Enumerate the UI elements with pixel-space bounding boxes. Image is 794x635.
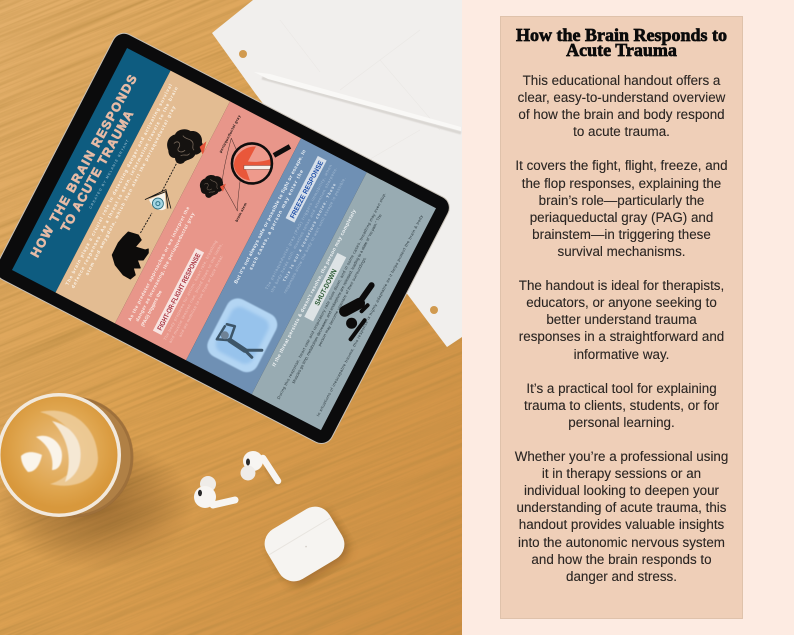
description text: responses in a straightforward and: [519, 329, 724, 344]
dotted line bear to eye: [140, 213, 152, 233]
description text: better understand trauma: [546, 312, 697, 327]
cork coaster: [13, 397, 133, 517]
heading: Acute Trauma: [566, 40, 677, 60]
intro text: defence responses. As a threat is seen, information travels to the brain: [70, 86, 179, 289]
title text: HOW THE BRAIN RESPONDS: [28, 73, 140, 260]
description text: it in therapy sessions or an: [542, 466, 701, 481]
freeze intro text: such cases, a person may enter the: [248, 169, 305, 271]
predator text: (PAG) triggers the: [140, 289, 163, 327]
icon: small brain with PAG: [200, 175, 226, 198]
label: freeze response: FREEZE RESPONSE: [289, 160, 325, 220]
label: periaqueductal gray: periaqueductal gray: [219, 114, 242, 154]
description text: educators, or anyone seeking to: [526, 295, 717, 310]
title text: TO ACUTE TRAUMA: [58, 108, 136, 234]
predator text: danger as increasing, the periaqueductal gray: [135, 211, 195, 322]
right text panel: [462, 0, 794, 635]
shut down intro text: If the threat persists & doesn't resolve, the person may completely: [271, 209, 358, 368]
section: shut down: [252, 172, 439, 432]
section: freeze response: [186, 138, 367, 394]
desk scene: [0, 0, 462, 635]
description text: and how the brain responds to: [531, 552, 712, 567]
dotted line eye to brain: [162, 162, 177, 191]
description text: brainstem—in triggering these: [532, 227, 711, 242]
latte art: [21, 411, 98, 486]
heading: How the Brain Responds to: [516, 25, 727, 45]
shut down description: person may become unaware of their surroundings.: [317, 256, 367, 347]
tablet: [0, 29, 454, 448]
description text: individual looking to deepen your: [524, 483, 719, 498]
heading: [516, 25, 727, 60]
description text: the flop responses, explaining the: [522, 176, 721, 191]
description text: personal learning.: [568, 415, 675, 430]
title credit: CREATED BY MELANIE BRYANT: [88, 139, 130, 209]
coffee shadow: [0, 440, 195, 570]
section: title band: [12, 48, 171, 293]
freeze description: the body holds still, muscles tense and attention sharpens.: [269, 166, 338, 293]
freeze description: responses allow the body to wait until escape is possible.: [282, 176, 347, 294]
freeze intro text: But it's not always safe or possible to fight or escape. In: [233, 149, 308, 285]
airpods case shadow: [264, 505, 354, 591]
description text: This educational handout offers a: [523, 73, 720, 88]
fight or flight description: and we mobilise to run from or face threat.: [177, 254, 224, 338]
screen: infographic page: [12, 48, 439, 432]
description text: brain’s role—particularly the: [539, 193, 704, 208]
icon: collapsed figure: [345, 285, 372, 339]
icon: figure frozen in ice block: [203, 294, 281, 376]
freeze description: This is not a conscious choice. These: [282, 182, 337, 282]
description text: [514, 73, 728, 584]
intro text: stem and amygdala, which then alert the periaqueductal gray: [84, 105, 176, 276]
description text: informative way.: [574, 346, 669, 362]
icon: large brain: [167, 129, 206, 164]
predator text: As the predator approaches or we interpret the: [127, 206, 191, 322]
description text: periaqueductal gray (PAG) and: [530, 210, 713, 225]
freeze description: The periaqueductal gray (PAG) triggers immobility, when: [264, 164, 333, 290]
label: brain stem: brain stem: [235, 202, 248, 223]
description text: understanding of acute trauma, this: [517, 500, 726, 515]
white paper sheet: [212, 0, 462, 347]
description text: The handout is ideal for therapists,: [519, 278, 724, 293]
description text: It covers the fight, flight, freeze, and: [515, 158, 728, 173]
icon: earbud right: [240, 451, 279, 484]
description text: into the autonomic nervous system: [518, 535, 725, 550]
label: shut down: SHUT-DOWN: [314, 268, 339, 307]
icon: earbud left: [194, 476, 235, 508]
description text: survival mechanisms.: [558, 244, 686, 259]
icon: bear: [112, 232, 148, 279]
description text: clear, easy-to-understand overview: [518, 90, 725, 105]
PAG pointer lines: [203, 138, 266, 211]
description text: trauma to clients, students, or for: [524, 398, 719, 413]
wood desk background: [0, 0, 462, 635]
closing note: In situations of inescapable trauma, this response is highly adaptable as it helps protect the brain & body: [315, 213, 424, 417]
icon: coffee cup on cork coaster: [0, 393, 133, 517]
description text: It’s a practical tool for explaining: [526, 381, 717, 396]
icon: airpods case: [258, 500, 351, 588]
description text: Whether you’re a professional using: [515, 449, 728, 464]
icon: eye: [145, 190, 171, 210]
fight or flight description: and muscle tension rise, blood flows to the limbs,: [167, 242, 223, 344]
tablet body: [0, 29, 454, 448]
section: predator detection: [56, 71, 238, 328]
paper hole top: [239, 50, 247, 58]
shut down description: During this response, heart rate and respiratory rate slow down, and in some cases, breathing may even stop.: [276, 192, 387, 400]
shut down description: Muscles go limp, metabolism decreases, and endorphins are released, leading to a state of "no pain." The: [291, 213, 383, 384]
text card: [500, 16, 743, 619]
icon: magnifier: [232, 143, 290, 183]
stylus pen: [254, 72, 461, 133]
section: fight or flight: [115, 101, 311, 365]
fight or flight description: The body prepares for action: heart rate, breathing: [162, 239, 218, 341]
description text: of how the brain and body respond: [518, 107, 725, 122]
label: shut down: [304, 253, 346, 321]
coffee surface: [0, 396, 118, 514]
paper hole bottom: [430, 306, 438, 314]
description text: to acute trauma.: [573, 124, 670, 139]
description text: handout provides valuable insights: [519, 517, 724, 532]
cup rim: [0, 393, 121, 517]
description text: danger and stress.: [566, 569, 677, 584]
label: fight or flight: FIGHT-OR-FLIGHT RESPONSE: [157, 252, 203, 332]
intro text: The brain plays a crucial role in detecting danger and activating survival: [65, 83, 173, 286]
